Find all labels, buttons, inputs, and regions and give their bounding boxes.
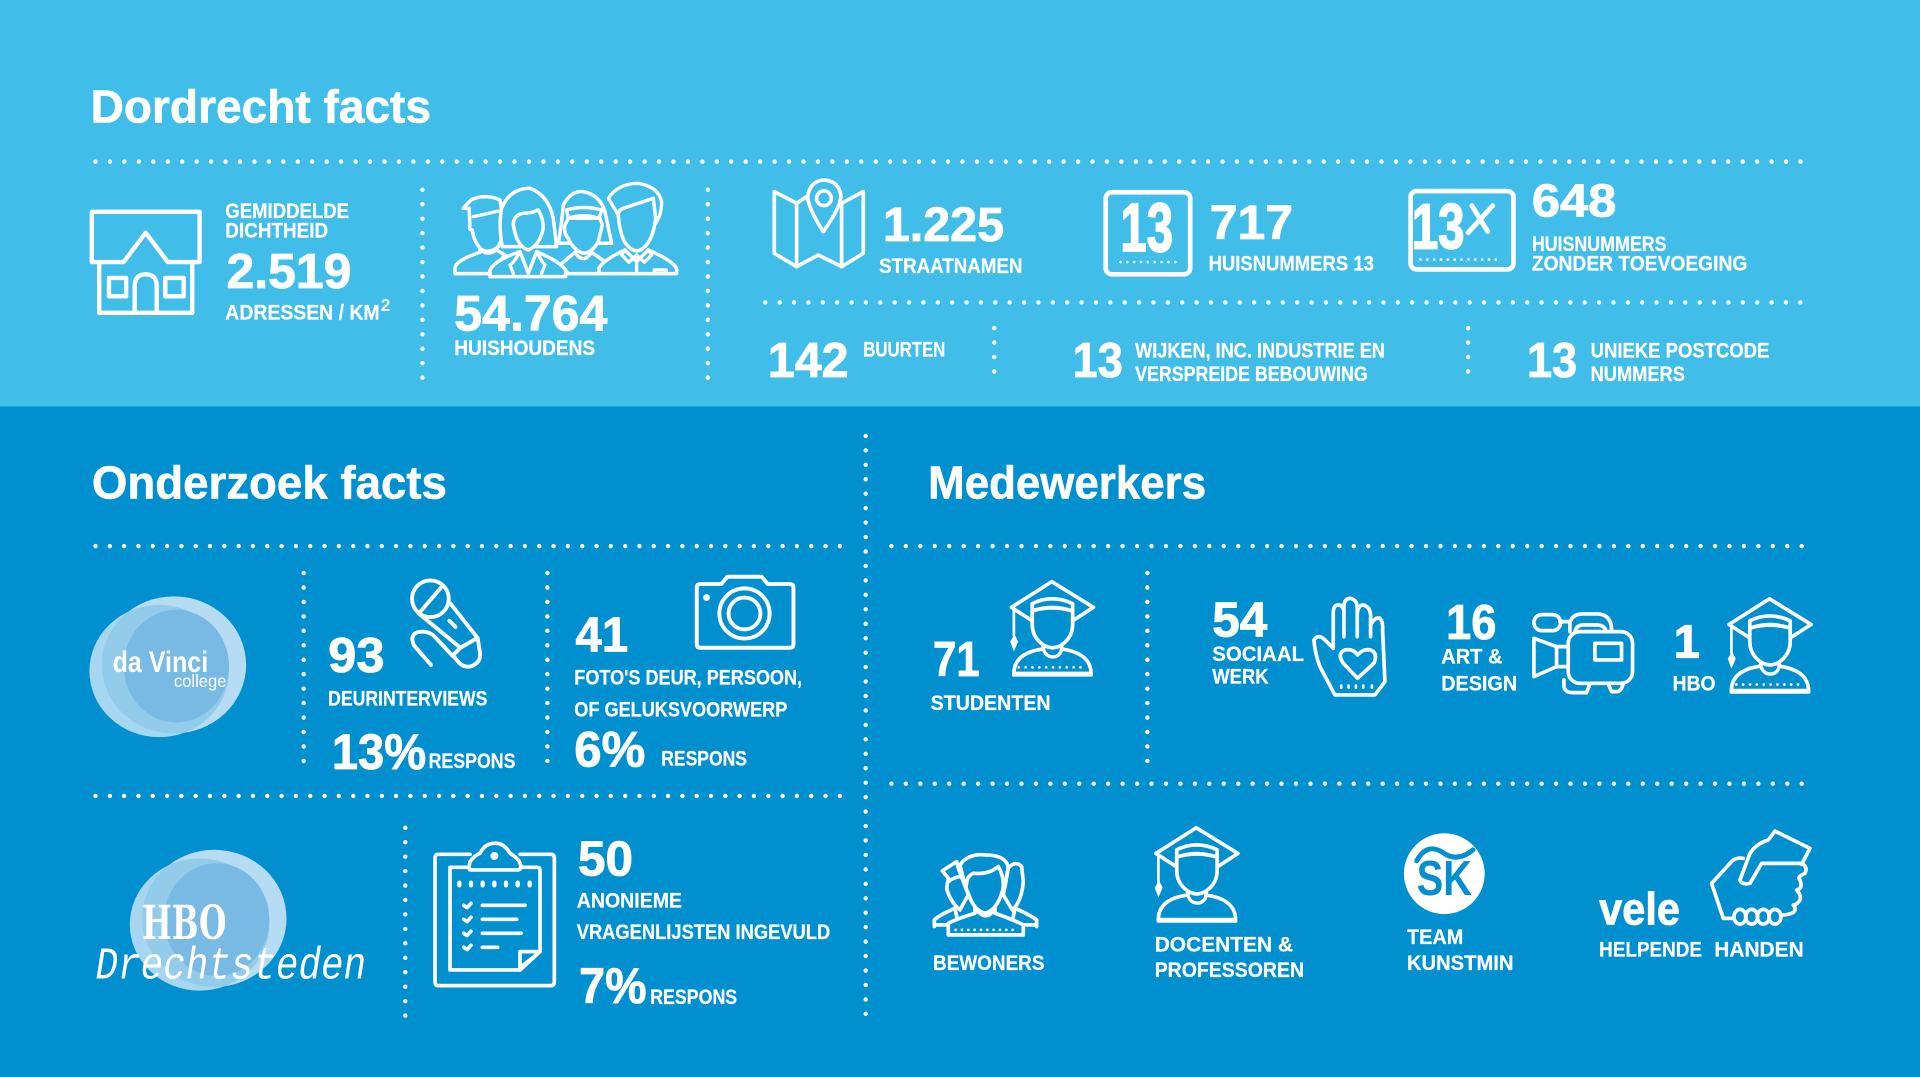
- text: wijken: WIJKEN, INC. INDUSTRIE EN: [1135, 339, 1385, 363]
- text: sociaal werk: [1212, 594, 1304, 688]
- text: huisnummers 13: 717: [1210, 197, 1293, 250]
- text: team kunstmin: TEAM: [1407, 925, 1463, 949]
- text: deurinterviews: 13%: [332, 724, 426, 780]
- text: huisnummers 13: [1209, 197, 1374, 276]
- text: art and design: DESIGN: [1441, 672, 1517, 696]
- text: foto's: 41: [576, 608, 628, 662]
- text: vele helpende handen: [1599, 883, 1804, 961]
- text: hbo: [1673, 616, 1716, 696]
- text: gemiddelde dichtheid: GEMIDDELDE: [225, 199, 349, 223]
- text: huisnummers zonder toevoeging: [1532, 175, 1747, 276]
- text: anonieme vragenlijsten: 7%: [579, 958, 647, 1014]
- text: sociaal werk: SOCIAAL: [1212, 642, 1304, 666]
- text: gemiddelde dichtheid: 2: [381, 295, 390, 315]
- text: docenten en professoren: DOCENTEN &: [1155, 932, 1293, 956]
- heading: Dordrecht facts: Dordrecht facts: [91, 80, 431, 132]
- icon: photo camera: [697, 577, 793, 648]
- text: sociaal werk: WERK: [1212, 664, 1269, 688]
- text: gemiddelde dichtheid: DICHTHEID: [225, 219, 328, 243]
- text: straatnamen: STRAATNAMEN: [879, 254, 1022, 278]
- text: buurten: 142: [768, 334, 849, 388]
- text: wijken: [1073, 334, 1385, 388]
- text: wijken: 13: [1073, 334, 1123, 388]
- text: art and design: 16: [1446, 596, 1496, 650]
- icon: group of people: [455, 183, 677, 277]
- logo: HBO Drechtsteden: HBO: [142, 895, 227, 950]
- text: deurinterviews: DEURINTERVIEWS: [328, 686, 487, 710]
- heading: Medewerkers: Medewerkers: [928, 456, 1206, 508]
- text: docenten en professoren: PROFESSOREN: [1155, 958, 1304, 982]
- text: foto's: FOTO'S DEUR, PERSOON,: [574, 665, 802, 689]
- text: docenten en professoren: [1155, 932, 1304, 982]
- text: studenten: STUDENTEN: [931, 691, 1051, 715]
- text: foto's: RESPONS: [661, 746, 747, 770]
- text: huisnummers zonder toevoeging: HUISNUMMERS: [1532, 232, 1667, 256]
- text: studenten: 71: [933, 633, 980, 687]
- panel: Dordrecht facts: [0, 0, 1920, 407]
- text: vele helpende handen: vele: [1599, 883, 1680, 934]
- text: unieke postcode nummers: 13: [1527, 334, 1577, 388]
- icon: hand with heart: [1314, 598, 1385, 695]
- text: art and design: ART &: [1441, 645, 1502, 669]
- text: gemiddelde dichtheid: [225, 199, 390, 325]
- text: foto's: [574, 608, 802, 778]
- panel: Medewerkers: [866, 407, 1920, 1077]
- text: vele helpende handen: HELPENDE: [1599, 937, 1702, 961]
- logo: da Vinci college: college: [174, 671, 227, 691]
- text: huisnummers 13: HUISNUMMERS 13: [1209, 252, 1374, 276]
- icon: clipboard: [435, 843, 554, 986]
- logo: SK team kunstmin: [1404, 833, 1485, 914]
- text: wijken: VERSPREIDE BEBOUWING: [1135, 362, 1368, 386]
- text: deurinterviews: RESPONS: [429, 749, 516, 773]
- text: team kunstmin: KUNSTMIN: [1407, 951, 1513, 975]
- text: art and design: [1441, 596, 1517, 696]
- icon: house number 13 without addition: [1411, 191, 1513, 269]
- logo: HBO Drechtsteden: [96, 850, 366, 992]
- icon: residents: [934, 855, 1037, 935]
- icon: teacher: [1155, 828, 1238, 921]
- text: anonieme vragenlijsten: RESPONS: [650, 985, 737, 1009]
- logo: da Vinci college: da Vinci: [113, 646, 208, 679]
- heading: Onderzoek facts: Onderzoek facts: [92, 456, 447, 508]
- text: sociaal werk: 54: [1212, 594, 1267, 648]
- text: huisnummers zonder toevoeging: ZONDER TOEVOEGING: [1532, 252, 1747, 276]
- text: huishoudens: HUISHOUDENS: [454, 336, 595, 360]
- icon: helping fist: [1712, 831, 1810, 924]
- text: straatnamen: [879, 199, 1022, 278]
- panel: Onderzoek facts: [89, 464, 842, 1018]
- icon: graduate student: [1010, 582, 1093, 675]
- text: hbo: 1: [1674, 616, 1700, 668]
- logo: HBO Drechtsteden: Drechtsteden: [96, 940, 366, 992]
- text: buurten: [768, 334, 945, 388]
- text: vele helpende handen: HANDEN: [1714, 937, 1804, 961]
- icon: house number 13: [1106, 189, 1190, 274]
- text: buurten: BUURTEN: [863, 337, 945, 361]
- text: anonieme vragenlijsten: [577, 833, 830, 1014]
- text: hbo: HBO: [1673, 672, 1716, 696]
- icon: video camera: [1534, 614, 1633, 693]
- logo: da Vinci college: [89, 596, 246, 737]
- text: anonieme vragenlijsten: ANONIEME: [577, 888, 682, 912]
- text: deurinterviews: 93: [328, 629, 384, 683]
- text: bewoners: BEWONERS: [933, 951, 1044, 975]
- icon: house number 13: 13: [1120, 189, 1173, 266]
- icon: house: [92, 212, 200, 313]
- icon: graduate hbo: [1728, 599, 1811, 692]
- text: straatnamen: 1.225: [883, 199, 1004, 252]
- icon: house number 13 without addition: 13: [1412, 192, 1464, 263]
- text: team kunstmin: [1407, 925, 1513, 975]
- text: unieke postcode nummers: UNIEKE POSTCODE: [1591, 339, 1769, 363]
- text: studenten: [931, 633, 1051, 715]
- logo: SK team kunstmin: SK: [1417, 852, 1472, 906]
- text: deurinterviews: [328, 629, 516, 780]
- text: gemiddelde dichtheid: ADRESSEN / KM: [225, 301, 380, 325]
- icon: microphone: [412, 580, 480, 667]
- text: gemiddelde dichtheid: 2.519: [227, 245, 351, 299]
- text: unieke postcode nummers: NUMMERS: [1591, 362, 1685, 386]
- text: anonieme vragenlijsten: VRAGENLIJSTEN INGEVULD: [577, 920, 830, 944]
- text: foto's: OF GELUKSVOORWERP: [574, 697, 787, 721]
- text: foto's: 6%: [574, 722, 645, 778]
- text: huisnummers zonder toevoeging: 648: [1532, 175, 1616, 227]
- text: huishoudens: 54.764: [454, 286, 607, 342]
- icon: map with pin: [774, 180, 863, 267]
- text: unieke postcode nummers: [1527, 334, 1769, 388]
- text: anonieme vragenlijsten: 50: [578, 833, 633, 887]
